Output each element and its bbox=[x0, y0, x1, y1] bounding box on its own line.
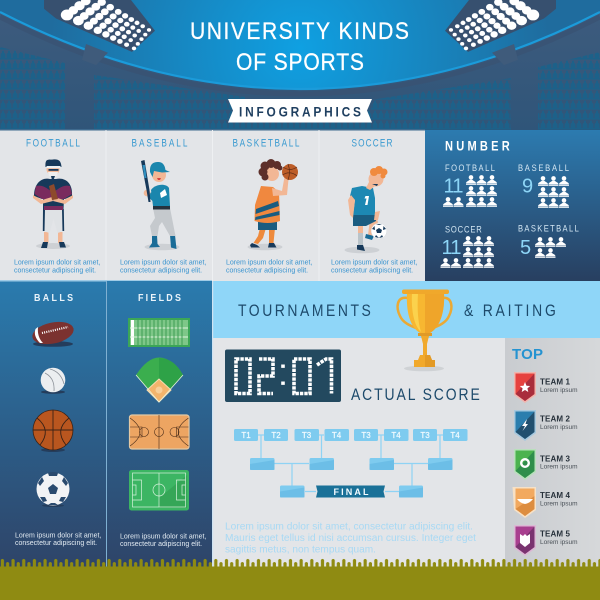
icon: baseball bbox=[41, 368, 65, 394]
tournament bracket: T3 bbox=[302, 431, 312, 440]
ribbon: final bbox=[316, 486, 385, 498]
caption: consectetur adipiscing elit. bbox=[331, 268, 413, 274]
icon: american football field bbox=[128, 318, 190, 347]
icon: american football bbox=[30, 318, 76, 348]
scoreboard bbox=[225, 350, 341, 402]
team 2: TEAM 2 bbox=[540, 414, 571, 424]
icon: soccer field bbox=[129, 470, 189, 510]
stat: basketball: 5 bbox=[520, 237, 531, 259]
team 5: Lorem ipsum bbox=[540, 539, 578, 546]
ribbon: infographics bbox=[228, 99, 372, 122]
character: soccer player bbox=[344, 166, 388, 253]
panel: tournaments and rating bbox=[212, 281, 600, 568]
team 3: Lorem ipsum bbox=[540, 464, 578, 470]
character: basketball player bbox=[248, 159, 298, 250]
caption: Lorem ipsum dolor sit amet, bbox=[120, 260, 206, 266]
panel: sports characters bbox=[0, 129, 425, 281]
tournament bracket: T4 bbox=[391, 431, 401, 440]
team 1: Lorem ipsum bbox=[540, 387, 578, 394]
stat: baseball: BASEBALL bbox=[518, 162, 569, 173]
heading: raiting: & RAITING bbox=[464, 302, 556, 320]
team 4: Lorem ipsum bbox=[540, 500, 578, 508]
stat: basketball: BASKETBALL bbox=[518, 223, 579, 234]
ribbon: infographics: INFOGRAPHICS bbox=[239, 104, 361, 120]
team 5 bbox=[514, 525, 578, 556]
panel: top teams bbox=[505, 338, 600, 568]
orange hair bbox=[370, 166, 388, 178]
tournament bracket: T1 bbox=[241, 431, 251, 440]
heading: number: NUMBER bbox=[445, 138, 510, 154]
caption: Lorem ipsum dolor sit amet, bbox=[15, 532, 101, 540]
icon: soccer ball bbox=[36, 472, 70, 507]
stat: football bbox=[443, 162, 497, 207]
team 3: TEAM 3 bbox=[540, 454, 571, 464]
sport: soccer bbox=[331, 137, 417, 274]
title: OF SPORTS bbox=[236, 47, 364, 75]
curved sky dome bbox=[0, 0, 600, 89]
paragraph line 2: Mauris eget tellus id nisi accumsan cursus. Integer eget bbox=[225, 532, 476, 544]
sport: soccer: SOCCER bbox=[352, 137, 392, 150]
panel: balls bbox=[0, 280, 212, 568]
header: stadium bbox=[0, 0, 600, 130]
caption: consectetur adipiscing elit. bbox=[120, 541, 202, 548]
tournament bracket: T2 bbox=[271, 431, 281, 440]
curly hair bbox=[258, 159, 282, 180]
floodlight right bbox=[445, 0, 556, 65]
panel: fields bbox=[106, 281, 212, 568]
caption: consectetur adipiscing elit. bbox=[14, 268, 96, 274]
team 3 bbox=[514, 449, 578, 480]
tournament bracket: T4 bbox=[450, 431, 460, 440]
heading: balls: BALLS bbox=[34, 292, 74, 304]
stat: soccer: SOCCER bbox=[445, 224, 482, 235]
stat: baseball: 9 bbox=[522, 176, 533, 198]
caption: consectetur adipiscing elit. bbox=[120, 268, 202, 274]
title bbox=[190, 16, 409, 75]
caption: Lorem ipsum dolor sit amet, bbox=[226, 260, 312, 266]
team 5: TEAM 5 bbox=[540, 530, 571, 538]
heading: tournaments: TOURNAMENTS bbox=[238, 302, 371, 320]
title: UNIVERSITY KINDS bbox=[190, 16, 409, 44]
team 1 bbox=[514, 372, 578, 403]
floodlight left bbox=[44, 0, 155, 65]
caption: Lorem ipsum dolor sit amet, bbox=[120, 534, 206, 540]
sport: football bbox=[14, 137, 100, 274]
heading: fields: FIELDS bbox=[138, 292, 181, 304]
caption: consectetur adipiscing elit. bbox=[226, 268, 308, 274]
stat: football: 11 bbox=[444, 176, 464, 198]
stat: basketball bbox=[518, 223, 579, 259]
label: actual score: ACTUAL SCORE bbox=[351, 386, 480, 404]
heading: top: TOP bbox=[512, 346, 543, 363]
character: baseball player bbox=[141, 160, 180, 250]
sport: basketball: BASKETBALL bbox=[232, 137, 300, 150]
stat: football: FOOTBALL bbox=[445, 162, 495, 173]
icon: baseball diamond bbox=[136, 358, 183, 402]
caption: Lorem ipsum dolor sit amet, bbox=[14, 260, 100, 266]
icon: basketball court bbox=[130, 415, 189, 449]
tournament bracket bbox=[234, 429, 468, 498]
stat: soccer: 11 bbox=[442, 237, 462, 259]
icon: trophy bbox=[398, 290, 451, 371]
team 2: Lorem ipsum bbox=[540, 424, 578, 431]
character: football player bbox=[33, 159, 73, 249]
team 2 bbox=[514, 410, 578, 441]
team 4 bbox=[512, 487, 578, 518]
grass bbox=[0, 558, 600, 600]
tournament bracket: T3 bbox=[420, 431, 430, 440]
crowd stands bbox=[0, 47, 600, 130]
paragraph line 3: sagittis metus, non tempus quam. bbox=[225, 544, 376, 556]
paragraph: Lorem ipsum dolor sit amet, consectetur adipiscing elit. bbox=[225, 520, 473, 532]
sport: football: FOOTBALL bbox=[26, 137, 81, 150]
team 4: TEAM 4 bbox=[540, 491, 571, 500]
tournament bracket: T4 bbox=[332, 431, 342, 440]
sport: baseball bbox=[120, 137, 206, 274]
tournament bracket: T3 bbox=[361, 431, 371, 440]
caption: consectetur adipiscing elit. bbox=[15, 540, 97, 547]
icon: basketball bbox=[33, 410, 73, 452]
ribbon: final: FINAL bbox=[334, 487, 369, 497]
caption: Lorem ipsum dolor sit amet, bbox=[331, 260, 417, 266]
stat: baseball bbox=[518, 162, 569, 208]
team 1: TEAM 1 bbox=[540, 378, 571, 386]
sport: baseball: BASEBALL bbox=[132, 137, 188, 150]
stat: soccer bbox=[440, 224, 494, 268]
sport: basketball bbox=[226, 137, 312, 274]
panel: number bbox=[425, 130, 600, 281]
